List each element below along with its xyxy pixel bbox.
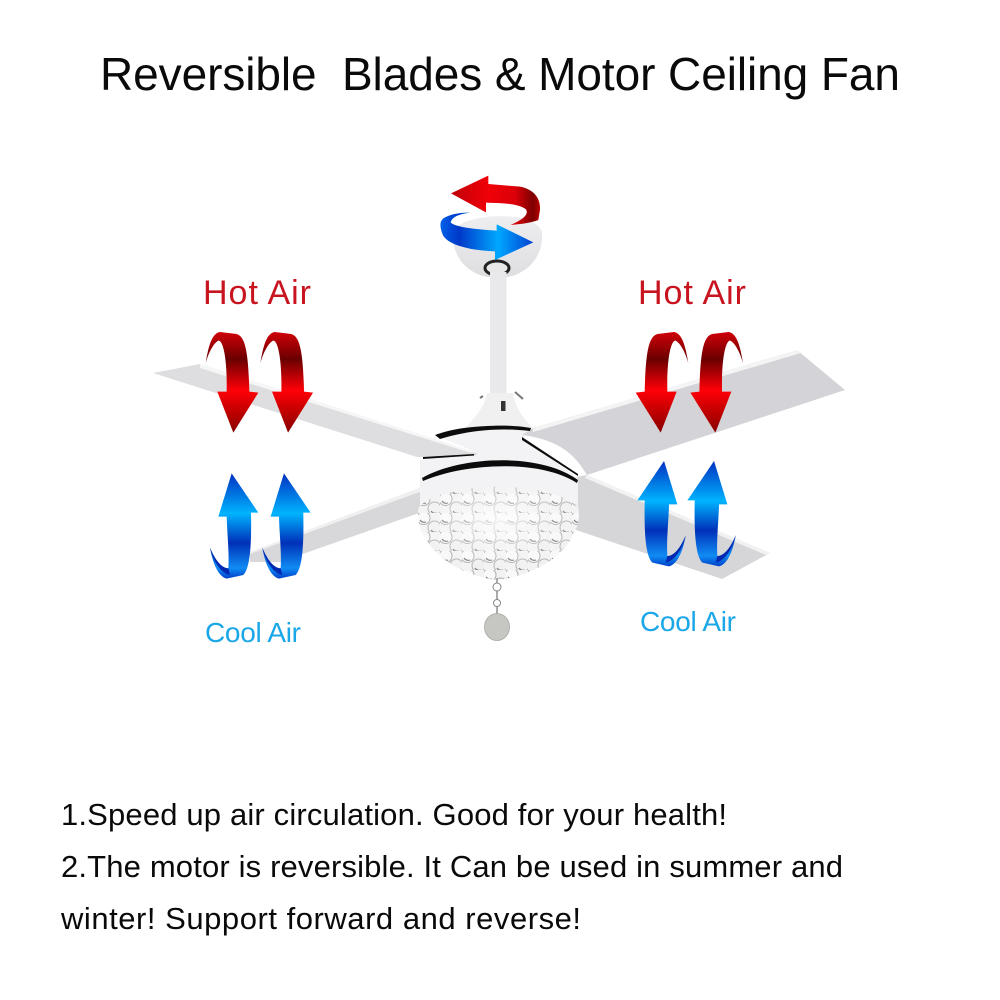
label: cool air left: Cool Air (205, 617, 301, 648)
hub black accent lines (422, 426, 578, 483)
benefits text: 2.The motor is reversible. It Can be used in summer and (61, 849, 843, 884)
benefits text: winter! Support forward and reverse! (60, 901, 581, 936)
label: hot air left: Hot Air (203, 274, 311, 312)
cool air arrows: right (637, 461, 736, 566)
reversing arrow: blue, top (440, 213, 533, 260)
pull chain with crystal ball (484, 578, 510, 640)
fan blade: lower left (250, 487, 422, 562)
downrod (490, 272, 506, 397)
motor hub (420, 392, 578, 507)
hot air arrows: left (206, 332, 313, 433)
fan blade: upper left (153, 364, 478, 457)
benefits text: 1.Speed up air circulation. Good for your health! (61, 797, 727, 832)
ceiling fan (153, 216, 845, 640)
canopy (453, 216, 542, 278)
label: hot air right: Hot Air (638, 274, 746, 312)
benefits text (60, 797, 843, 936)
title: Reversible Blades & Motor Ceiling Fan (100, 48, 900, 100)
canopy collar (485, 261, 509, 275)
crystal dome (418, 486, 579, 580)
cool air arrows: left (210, 473, 311, 579)
reversing arrow: red, top (451, 176, 540, 225)
fan blade: lower right (570, 475, 770, 579)
fan blade: upper right (522, 350, 845, 475)
label: cool air right: Cool Air (640, 606, 736, 637)
hot air arrows: right (636, 332, 743, 433)
